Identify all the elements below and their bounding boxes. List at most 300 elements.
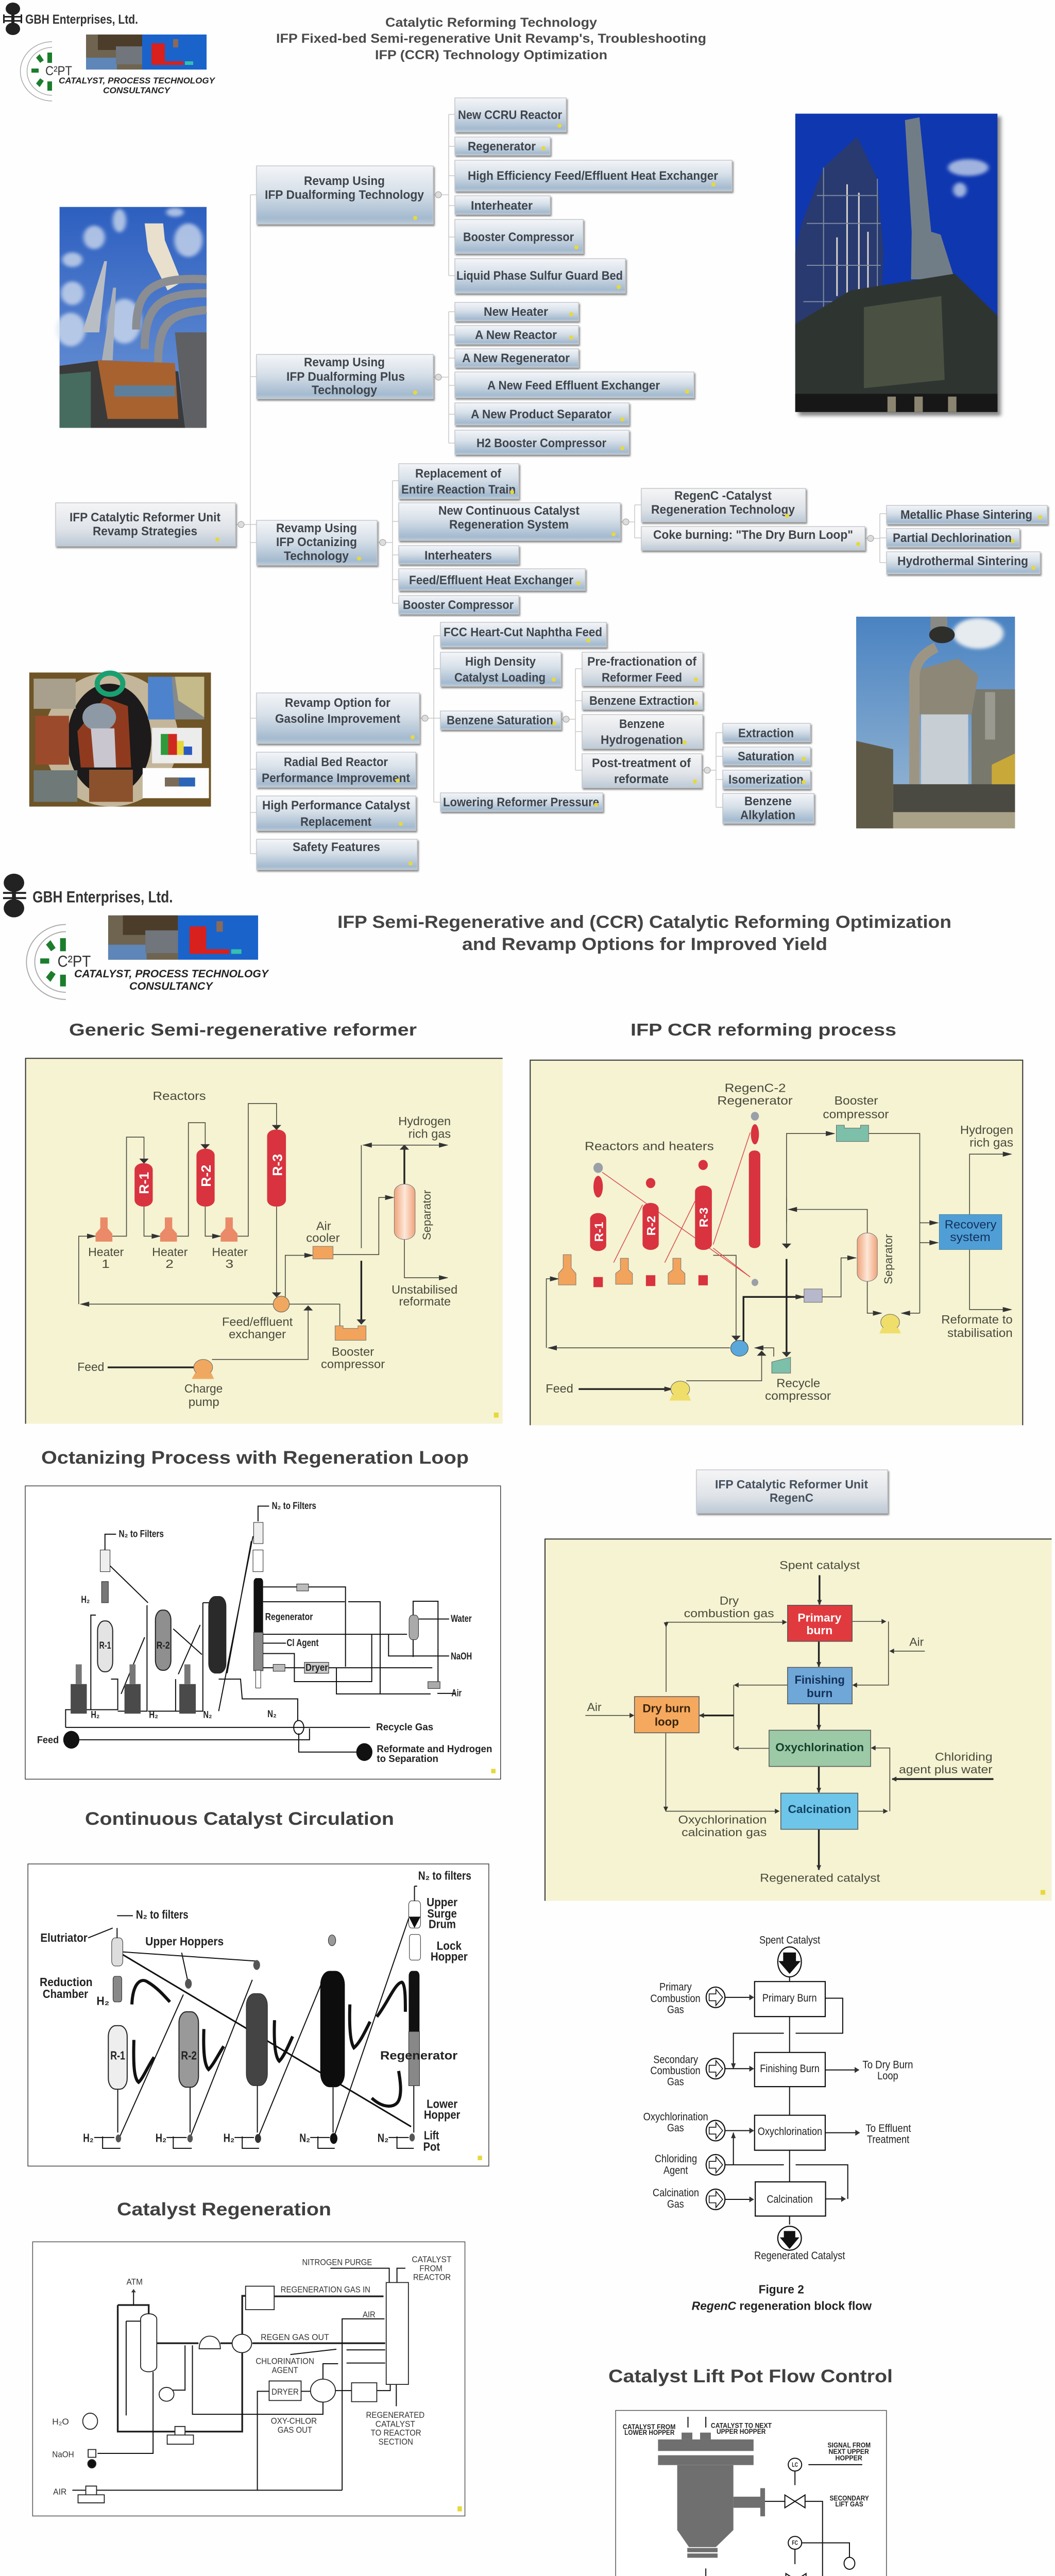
- labels: NEXT UPPER: [828, 2448, 869, 2455]
- box: Benzene Saturation: Benzene Saturation: [447, 714, 553, 727]
- box: Radial Bed Reactor: Performance Improvement: [262, 771, 410, 785]
- labels: Reactors: [152, 1090, 206, 1103]
- labels: ATM: [127, 2277, 143, 2286]
- labels: Separator: [882, 1234, 895, 1284]
- panel: Catalyst lift pot flow control diagram: [616, 2411, 887, 2576]
- labels: OXY-CHLOR: [271, 2416, 317, 2426]
- labels: [546, 1081, 1013, 1403]
- box: Regenerator: [455, 137, 550, 155]
- labels: compressor: [823, 1108, 889, 1121]
- box: dualforming: Revamp Using: [304, 174, 385, 188]
- box: Feed/Effluent Heat Exchanger: [399, 569, 585, 590]
- title: semi-regenerative and CCR optimization: and Revamp Options for Improved Yield: [462, 935, 827, 954]
- labels: Lower: [427, 2098, 458, 2111]
- labels: reformate: [399, 1295, 451, 1308]
- labels: Dry burn: [642, 1702, 691, 1715]
- panel: Catalyst regeneration diagram: [32, 2242, 465, 2516]
- title: semi-regenerative and CCR optimization: IFP Semi-Regenerative and (CCR) Catalytic Reforming Optimization: [337, 912, 951, 932]
- labels: Oxychlorination: [775, 1740, 864, 1754]
- labels: Oxychlorination: [678, 1813, 767, 1826]
- labels: [623, 2421, 871, 2576]
- labels: calcination gas: [682, 1825, 767, 1839]
- labels: DRYER: [271, 2387, 299, 2397]
- labels: R-1: [99, 1640, 111, 1651]
- box: IFP Catalytic Reformer Unit RegenC: RegenC: [770, 1491, 813, 1504]
- box: dualforming plus: [257, 354, 441, 399]
- labels: Spent catalyst: [779, 1558, 860, 1572]
- flow lines: [547, 1132, 1011, 1389]
- logo: GBH Enterprises and C2PT (top): CONSULTANCY: [103, 86, 171, 95]
- box: Booster Compressor: Booster Compressor: [403, 598, 514, 612]
- box: H2 Booster Compressor: [455, 430, 629, 454]
- logo: GBH Enterprises and C2PT (second section): C²PT: [58, 952, 91, 971]
- labels: N₂ to Filters: [272, 1501, 316, 1512]
- labels: Gas: [667, 2076, 684, 2088]
- labels: combustion gas: [684, 1606, 774, 1620]
- box: Benzene Hydrogenation: Benzene: [619, 717, 665, 731]
- title: semi-regenerative and CCR optimization: [337, 912, 951, 954]
- heading: generic semi-regenerative reformer: Generic Semi-regenerative reformer: [69, 1020, 417, 1039]
- labels: Dry: [720, 1594, 739, 1607]
- labels: N₂ to filters: [418, 1870, 471, 1883]
- labels: Heater: [152, 1246, 188, 1259]
- labels: [40, 1870, 471, 2154]
- box: Liquid Phase Sulfur Guard Bed: [455, 259, 625, 293]
- vessels: [590, 1112, 760, 1287]
- box: root: [56, 503, 244, 546]
- labels: Agent: [663, 2164, 688, 2177]
- labels: [52, 2255, 451, 2497]
- labels: Primary: [797, 1611, 841, 1624]
- box: Interheaters: Interheaters: [424, 549, 492, 563]
- box: root: IFP Catalytic Reformer Unit: [70, 511, 220, 524]
- labels: Lock: [437, 1940, 462, 1953]
- labels: Air: [316, 1219, 331, 1233]
- labels: N₂ to filters: [136, 1908, 189, 1922]
- labels: Elutriator: [40, 1931, 88, 1945]
- box: dualforming: [257, 166, 441, 224]
- labels: CATALYST: [376, 2419, 415, 2429]
- flow lines: [72, 2268, 405, 2490]
- icon: GBH emblem: [3, 3, 22, 35]
- panel: RegenC black and white block flow: [643, 1934, 913, 2313]
- labels: Cl Agent: [286, 1638, 319, 1649]
- box: A New Reactor: [455, 326, 578, 344]
- blocks: [635, 1605, 1045, 1895]
- labels: Chloriding: [655, 2153, 697, 2165]
- box: Partial Dechlorination: Partial Dechlorination: [893, 531, 1012, 545]
- vessels: [108, 1901, 482, 2160]
- logo: GBH Enterprises and C2PT (top): [3, 3, 216, 101]
- blocks: [706, 1947, 826, 2250]
- box: Saturation: [723, 747, 810, 765]
- box: RegenC: [641, 488, 806, 522]
- box: Benzene Alkylation: Benzene: [744, 794, 792, 808]
- labels: HOPPER: [836, 2454, 862, 2462]
- box: Radial Bed Reactor: [257, 752, 416, 787]
- box: Coke burning: Coke burning: "The Dry Burn Loop": [653, 528, 853, 542]
- reactors: R-2: [198, 1165, 214, 1187]
- box: A New Regenerator: [455, 349, 578, 367]
- flow lines: [725, 1977, 860, 2225]
- labels: Recycle Gas: [376, 1722, 433, 1733]
- labels: H₂: [96, 1995, 109, 2008]
- heading: Octanizing process: Octanizing Process with Regeneration Loop: [41, 1448, 469, 1468]
- labels: Gas: [667, 2122, 684, 2134]
- labels: AGENT: [272, 2365, 298, 2375]
- box: Isomerization: [723, 770, 810, 789]
- box: High Efficiency Feed/Effluent Heat Exchanger: High Efficiency Feed/Effluent Heat Exchanger: [468, 169, 718, 183]
- box: FCC Heart-Cut Naphtha Feed: [440, 622, 606, 647]
- heaters and equipment: [95, 1184, 499, 1418]
- labels: H₂O: [52, 2417, 69, 2427]
- labels: R-2: [157, 1640, 170, 1651]
- box: High Density Catalyst Loading: High Density: [465, 655, 536, 669]
- box: dualforming: IFP Dualforming Technology: [265, 188, 424, 202]
- box: Hydrothermal Sintering: Hydrothermal Sintering: [897, 554, 1028, 568]
- box: Post-treatment of reformate: [582, 754, 710, 788]
- box: Saturation: Saturation: [738, 750, 794, 764]
- box: Feed/Effluent Heat Exchanger: Feed/Effluent Heat Exchanger: [409, 573, 573, 587]
- labels: Combustion: [650, 1992, 701, 2005]
- labels: Heater: [88, 1246, 124, 1259]
- logo: GBH Enterprises and C2PT (second section): CATALYST, PROCESS TECHNOLOGY: [74, 968, 269, 980]
- labels: N₂: [267, 1708, 277, 1720]
- labels: Hopper: [424, 2109, 461, 2122]
- box: Coke burning: [641, 527, 874, 550]
- box: octanizing: Technology: [284, 549, 349, 563]
- logo image collage: [108, 916, 258, 960]
- box: A New Feed Effluent Exchanger: [455, 372, 694, 398]
- labels: Combustion: [650, 2064, 701, 2077]
- logo rings: [20, 42, 52, 101]
- labels: rich gas: [969, 1136, 1013, 1149]
- reactors: [134, 1129, 286, 1207]
- labels: Regenerated catalyst: [760, 1871, 880, 1885]
- labels: To Effluent: [865, 2122, 911, 2135]
- box: Booster Compressor: [455, 219, 583, 253]
- labels: Charge: [184, 1382, 223, 1396]
- box: Gasoline Improvement: Revamp Option for: [285, 696, 390, 710]
- photo: CCR tower with operators: [856, 617, 1015, 828]
- labels: REACTOR: [413, 2272, 451, 2282]
- box: New Continuous Catalyst Regeneration System: Regeneration System: [449, 518, 569, 532]
- labels: SECTION: [379, 2437, 413, 2447]
- labels: Hydrogen: [398, 1115, 451, 1128]
- box: Safety Features: [257, 839, 417, 870]
- labels: to Separation: [377, 1754, 438, 1765]
- labels: REGEN GAS OUT: [261, 2332, 329, 2342]
- labels: Upper Hoppers: [145, 1935, 224, 1948]
- icon: circle arrows: [778, 1953, 801, 2249]
- box: Interheater: Interheater: [471, 199, 533, 213]
- labels: Heater: [212, 1246, 248, 1259]
- lift pot vessel: [658, 2433, 765, 2558]
- box: New Heater: New Heater: [484, 305, 548, 319]
- caption: Figure 2: Figure 2: [759, 2283, 804, 2296]
- box: New CCRU Reactor: New CCRU Reactor: [458, 108, 562, 122]
- labels: Spent Catalyst: [759, 1934, 821, 1946]
- box: New Heater: [455, 302, 578, 321]
- box: IFP Catalytic Reformer Unit RegenC: IFP Catalytic Reformer Unit: [715, 1478, 868, 1491]
- labels: Regenerator: [717, 1094, 793, 1107]
- caption: Figure 2: [692, 2283, 872, 2313]
- box: dualforming plus: IFP Dualforming Plus: [286, 370, 405, 384]
- labels: Water: [451, 1614, 472, 1624]
- box: root: Revamp Strategies: [93, 524, 197, 538]
- labels: AIR: [53, 2487, 66, 2497]
- box: New Continuous Catalyst Regeneration System: New Continuous Catalyst: [438, 504, 580, 518]
- labels: H₂: [156, 2132, 166, 2145]
- caption: Figure 2: RegenC regeneration block flow: [692, 2300, 872, 2313]
- heading: Catalyst Regeneration: Catalyst Regeneration: [117, 2199, 331, 2219]
- labels: H₂: [81, 1595, 90, 1605]
- labels: Primary: [659, 1981, 692, 1993]
- box: Metallic Phase Sintering: [887, 505, 1047, 524]
- box: High Performance Catalyst: Replacement: [300, 815, 371, 829]
- labels: exchanger: [229, 1328, 286, 1341]
- box: High Density Catalyst Loading: Catalyst Loading: [454, 671, 546, 685]
- box: A New Product Separator: A New Product Separator: [471, 408, 611, 421]
- box: Pre-fractionation: Reformer Feed: [602, 671, 682, 685]
- vessels: R-1: [592, 1222, 606, 1242]
- labels: 1: [101, 1258, 110, 1271]
- title: catalytic reforming: Catalytic Reforming Technology: [385, 15, 597, 30]
- photo: refinery tower with stack: [795, 114, 1001, 416]
- logo: GBH Enterprises and C2PT (top): GBH Enterprises, Ltd.: [25, 12, 138, 27]
- labels: Feed: [546, 1382, 573, 1396]
- box: New Continuous Catalyst Regeneration System: [399, 503, 629, 540]
- labels: 3: [226, 1258, 233, 1271]
- labels: FC: [792, 2540, 798, 2547]
- title: catalytic reforming: [276, 15, 706, 62]
- box: Interheater: [455, 196, 550, 214]
- labels: Surge: [427, 1907, 457, 1921]
- logo: GBH Enterprises and C2PT (top): CATALYST, PROCESS TECHNOLOGY: [59, 76, 216, 86]
- labels: Drum: [429, 1918, 456, 1931]
- labels: Primary Burn: [762, 1992, 817, 2005]
- labels: Upper: [427, 1896, 458, 1909]
- labels: UPPER HOPPER: [717, 2428, 765, 2436]
- labels: H₂: [149, 1709, 158, 1720]
- box: Lowering Reformer Pressure: Lowering Reformer Pressure: [443, 795, 599, 809]
- box: Regenerator: Regenerator: [468, 140, 536, 154]
- labels: RegenC-2: [725, 1081, 786, 1095]
- box: High Efficiency Feed/Effluent Heat Exchanger: [455, 160, 732, 191]
- labels: CATALYST FROM: [623, 2423, 675, 2431]
- labels: Hydrogen: [960, 1124, 1013, 1137]
- labels: Regenerator: [380, 2049, 458, 2063]
- logo: GBH Enterprises and C2PT (second section): [3, 874, 269, 999]
- box: High Performance Catalyst: [257, 796, 416, 831]
- labels: NaOH: [52, 2449, 74, 2460]
- labels: Gas: [667, 2198, 684, 2210]
- box: Safety Features: Safety Features: [293, 840, 380, 854]
- labels: Dryer: [305, 1663, 328, 1673]
- box: Replacement of Entire Reaction Train: Replacement of: [415, 467, 502, 481]
- labels: R-2: [181, 2049, 197, 2063]
- box: Pre-fractionation: Pre-fractionation of: [587, 655, 697, 669]
- box: Interheaters: [399, 546, 519, 564]
- box: Benzene Hydrogenation: Hydrogenation: [601, 733, 683, 747]
- box: Gasoline Improvement: Gasoline Improvement: [275, 712, 400, 726]
- reactors: R-3: [270, 1154, 285, 1176]
- box: Liquid Phase Sulfur Guard Bed: Liquid Phase Sulfur Guard Bed: [456, 269, 623, 283]
- labels: [587, 1558, 993, 1885]
- box: Replacement of Entire Reaction Train: [399, 464, 519, 499]
- labels: burn: [807, 1686, 832, 1700]
- box: Pre-fractionation: [582, 652, 703, 686]
- labels: compressor: [321, 1358, 385, 1371]
- icon: inlet arrows: [709, 1989, 723, 2208]
- labels: Hopper: [431, 1951, 468, 1963]
- panel: generic semi-regenerative reformer diagram: [26, 1058, 503, 1424]
- box: octanizing: Revamp Using: [276, 521, 357, 535]
- labels: FROM: [419, 2263, 443, 2273]
- box: A New Regenerator: A New Regenerator: [462, 351, 570, 365]
- labels: Lift: [424, 2129, 439, 2143]
- labels: Air: [587, 1701, 602, 1714]
- flow lines: [88, 1886, 417, 2148]
- box: H2 Booster Compressor: H2 Booster Compressor: [477, 436, 606, 450]
- labels: burn: [806, 1623, 832, 1637]
- labels: Air: [451, 1688, 462, 1699]
- box: Benzene Alkylation: [723, 793, 814, 823]
- piping: [688, 2417, 880, 2576]
- labels: Treatment: [867, 2133, 910, 2146]
- equipment: [78, 2282, 462, 2512]
- box: High Performance Catalyst: High Performance Catalyst: [262, 799, 410, 812]
- box: Extraction: Extraction: [738, 726, 794, 740]
- labels: pump: [189, 1396, 219, 1409]
- labels: LOWER HOPPER: [624, 2429, 674, 2436]
- labels: Calcination: [653, 2187, 699, 2199]
- labels: Recycle: [776, 1377, 820, 1390]
- labels: compressor: [765, 1389, 831, 1403]
- logo: GBH Enterprises and C2PT (second section): GBH Enterprises, Ltd.: [32, 888, 173, 906]
- labels: N₂: [378, 2132, 388, 2145]
- labels: Calcination: [788, 1802, 851, 1816]
- reactors: R-1: [137, 1172, 152, 1194]
- labels: CHLORINATION: [256, 2356, 314, 2366]
- box: Booster Compressor: Booster Compressor: [463, 230, 574, 244]
- logo image collage: [86, 35, 207, 70]
- labels: agent plus water: [899, 1762, 993, 1776]
- labels: Feed/effluent: [222, 1315, 293, 1329]
- box: IFP Catalytic Reformer Unit RegenC: [696, 1470, 888, 1513]
- labels: Separator: [420, 1190, 433, 1240]
- labels: 2: [165, 1258, 174, 1271]
- labels: Booster: [332, 1346, 374, 1359]
- labels: Secondary: [653, 2054, 698, 2066]
- labels: cooler: [306, 1232, 340, 1245]
- labels: Feed: [77, 1361, 104, 1374]
- labels: Oxychlorination: [758, 2125, 822, 2138]
- logo rings: [26, 924, 66, 999]
- labels: REGENERATED: [366, 2410, 424, 2420]
- labels: CATALYST TO NEXT: [711, 2421, 772, 2430]
- box: Extraction: [723, 723, 810, 742]
- box: A New Product Separator: [455, 403, 629, 425]
- box: Benzene Extraction: Benzene Extraction: [589, 694, 694, 708]
- labels: GAS OUT: [278, 2425, 312, 2435]
- labels: loop: [655, 1715, 679, 1728]
- heading: IFP CCR reforming process: IFP CCR reforming process: [631, 1020, 896, 1039]
- box: Replacement of Entire Reaction Train: Entire Reaction Train: [401, 483, 516, 497]
- title: catalytic reforming: IFP (CCR) Technology Optimization: [375, 48, 607, 62]
- box: FCC Heart-Cut Naphtha Feed: FCC Heart-Cut Naphtha Feed: [444, 625, 602, 639]
- labels: system: [950, 1231, 991, 1244]
- labels: Reduction: [40, 1976, 93, 1989]
- labels: Finishing Burn: [760, 2062, 820, 2075]
- labels: SECONDARY: [829, 2494, 869, 2502]
- box: Isomerization: Isomerization: [728, 773, 804, 787]
- labels: N₂ to Filters: [119, 1529, 164, 1539]
- title: catalytic reforming: IFP Fixed-bed Semi-regenerative Unit Revamp's, Troubleshooting: [276, 31, 706, 46]
- box: Booster Compressor: [399, 596, 519, 614]
- labels: AIR: [363, 2310, 376, 2319]
- labels: Recovery: [945, 1218, 997, 1231]
- box: Radial Bed Reactor: Radial Bed Reactor: [284, 755, 388, 769]
- vessels: [63, 1522, 496, 1773]
- mind map: IFP catalytic reformer unit revamp strategies: [56, 98, 1047, 870]
- labels: Feed: [37, 1735, 59, 1745]
- labels: [37, 1501, 492, 1765]
- labels: Booster: [835, 1094, 878, 1107]
- labels: [77, 1090, 457, 1409]
- labels: N₂: [299, 2132, 310, 2145]
- labels: Regenerated Catalyst: [754, 2249, 845, 2262]
- labels: LC: [792, 2462, 798, 2468]
- labels: Oxychlorination: [643, 2111, 708, 2123]
- vessels: R-2: [644, 1216, 658, 1235]
- box: Gasoline Improvement: [257, 693, 428, 743]
- labels: TO REACTOR: [371, 2428, 421, 2438]
- box: Post-treatment of reformate: Post-treatment of: [592, 756, 691, 770]
- panel: Continuous catalyst circulation diagram: [28, 1864, 489, 2166]
- photo: refinery columns against cloudy sky: [56, 207, 207, 428]
- box: A New Reactor: A New Reactor: [475, 328, 557, 342]
- labels: NaOH: [451, 1651, 472, 1662]
- panel: RegenC coloured block flow diagram: [545, 1539, 1051, 1901]
- box: dualforming plus: Revamp Using: [304, 355, 385, 369]
- box: octanizing: [257, 520, 386, 565]
- labels: Air: [909, 1635, 924, 1648]
- heading: Catalyst Lift Pot Flow Control: Catalyst Lift Pot Flow Control: [608, 2366, 893, 2386]
- box: Benzene Saturation: [440, 711, 569, 730]
- labels: SIGNAL FROM: [828, 2441, 871, 2449]
- heading: Continuous Catalyst Circulation: Continuous Catalyst Circulation: [85, 1809, 394, 1829]
- box: A New Feed Effluent Exchanger: A New Feed Effluent Exchanger: [487, 379, 660, 393]
- labels: REGENERATION GAS IN: [281, 2284, 370, 2295]
- box: High Density Catalyst Loading: [440, 652, 561, 686]
- labels: Finishing: [795, 1673, 845, 1686]
- panel: IFP CCR reforming process diagram: [530, 1060, 1023, 1425]
- box: Post-treatment of reformate: reformate: [614, 772, 669, 786]
- labels: H₂: [91, 1709, 99, 1720]
- labels: rich gas: [409, 1128, 451, 1141]
- labels: Regenerator: [265, 1612, 313, 1622]
- photo: inspection collage: [29, 672, 211, 807]
- labels: R-1: [110, 2049, 125, 2063]
- icon: GBH emblem: [3, 874, 26, 918]
- labels: Calcination: [767, 2193, 813, 2206]
- labels: To Dry Burn: [862, 2059, 913, 2071]
- box: New CCRU Reactor: [455, 98, 566, 132]
- flow lines: [65, 1506, 456, 1752]
- labels: Gas: [667, 2004, 684, 2016]
- labels: Reactors and heaters: [585, 1140, 714, 1153]
